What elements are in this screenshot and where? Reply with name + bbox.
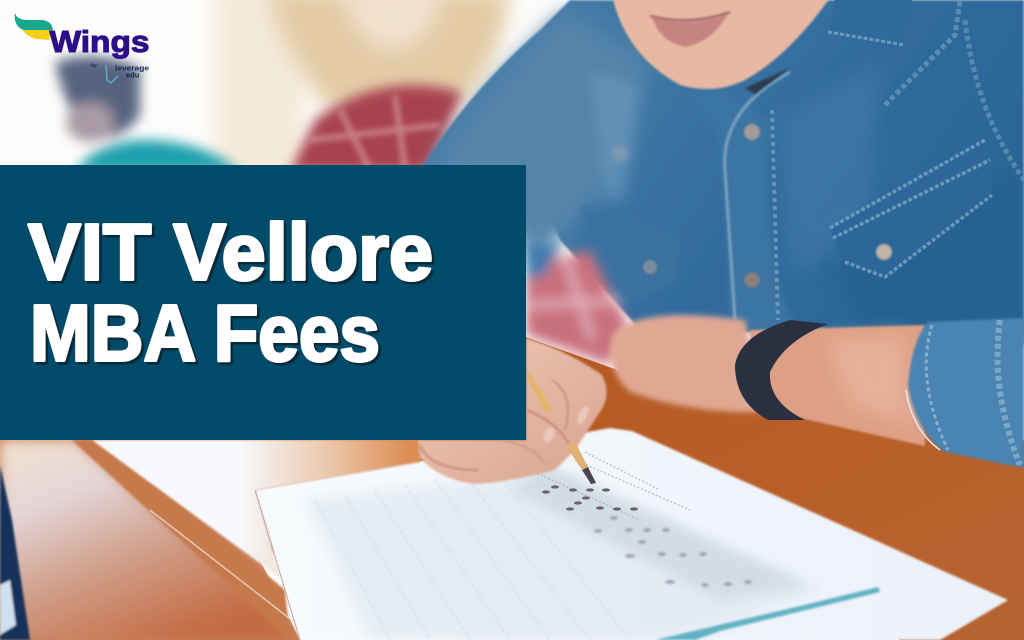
logo icon: teal and yellow wing xyxy=(15,13,53,40)
shirt placket and collar seams xyxy=(725,72,790,320)
shaded answer grid xyxy=(305,470,820,640)
background student: blonde hair and plaid shirt xyxy=(268,0,510,172)
background student: blurred head and shoulders xyxy=(55,56,240,172)
title: VIT Vellore MBA Fees: MBA Fees xyxy=(30,288,380,378)
pencil xyxy=(526,373,596,484)
resting left hand and forearm xyxy=(610,315,925,446)
answer sheet xyxy=(255,428,1008,640)
writing hand xyxy=(418,338,607,484)
logo byline: by xyxy=(91,63,97,69)
title: VIT Vellore MBA Fees: MBA Fees xyxy=(32,291,382,380)
pencil marks xyxy=(542,485,638,511)
denim sleeve cuff xyxy=(906,318,1024,468)
plaid sleeve xyxy=(526,240,628,365)
student chin and lips xyxy=(612,0,832,94)
logo byline: edu xyxy=(126,70,140,80)
fingernails xyxy=(541,426,557,444)
title: VIT Vellore MBA Fees: VIT Vellore xyxy=(28,208,433,296)
logo: Wings by Leverage Edu xyxy=(15,13,149,83)
title: VIT Vellore MBA Fees xyxy=(28,208,436,380)
shirt buttons xyxy=(612,124,892,288)
teal rule on the sheet xyxy=(655,587,880,640)
blurred dark object at lower-left edge xyxy=(0,465,30,640)
wooden desk, left side xyxy=(0,440,420,640)
logo byline xyxy=(91,63,149,83)
finger creases xyxy=(552,380,568,430)
title panel xyxy=(0,165,526,440)
logo wordmark: Wings xyxy=(50,24,150,59)
denim shirt xyxy=(420,0,1024,345)
title: VIT Vellore MBA Fees: VIT Vellore xyxy=(30,210,436,299)
wristband xyxy=(735,320,828,420)
logo byline: leverage xyxy=(115,64,149,72)
wooden desk, right side xyxy=(400,335,1024,640)
